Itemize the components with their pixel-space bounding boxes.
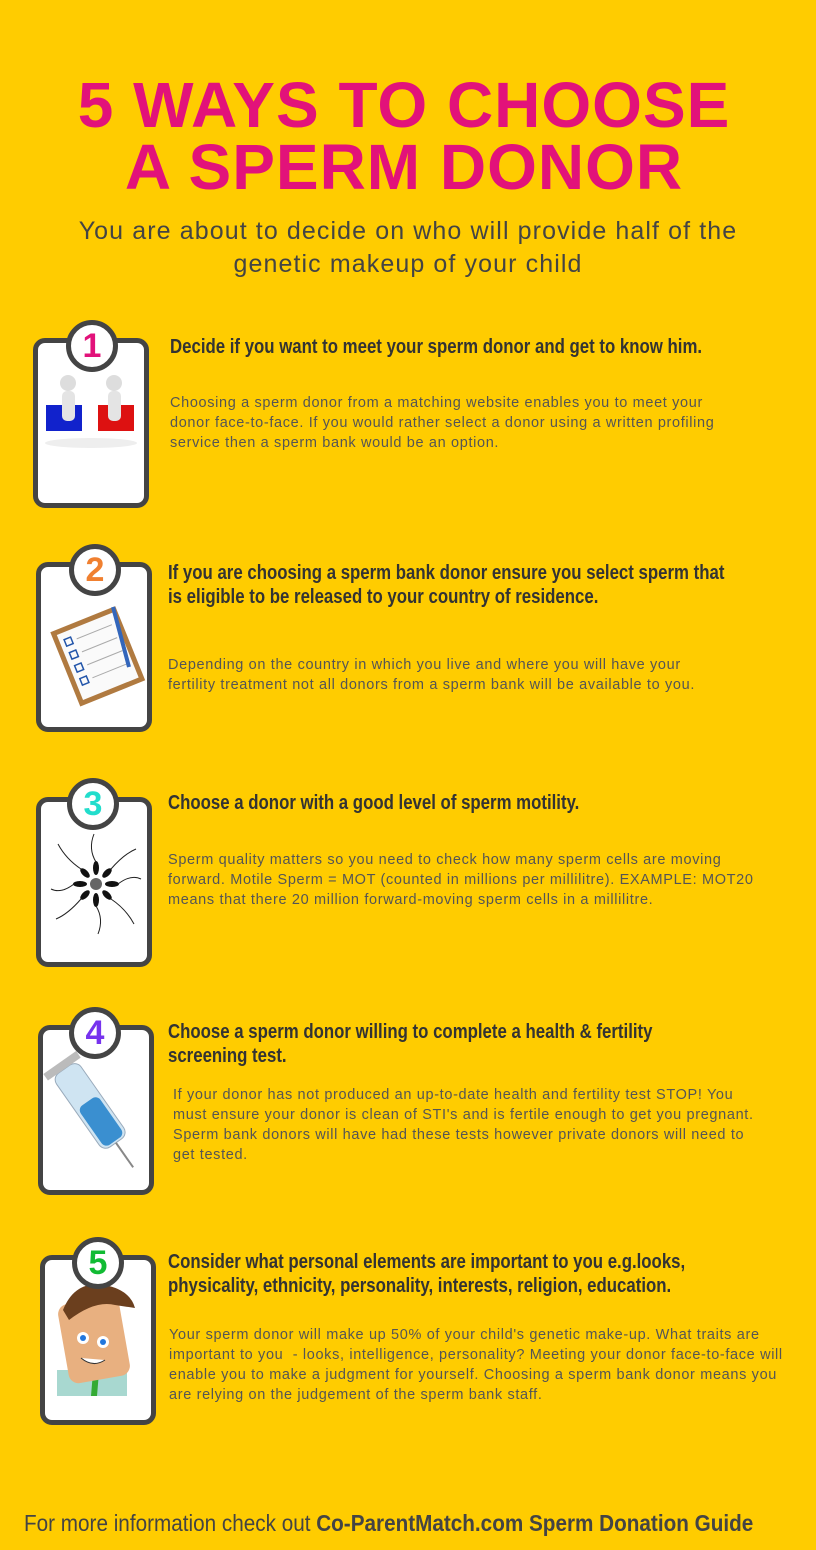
body 2 [168,657,695,693]
heading 5: Consider what personal elements are important to you e.g.looks, [168,1251,685,1273]
body 1 [170,395,714,451]
heading 5 [168,1251,685,1297]
body 4: get tested. [173,1147,248,1163]
heading 4: screening test. [168,1045,287,1067]
body 1: service then a sperm bank would be an option. [170,435,499,451]
number 2: 2 [86,551,104,589]
heading 1: Decide if you want to meet your sperm donor and get to know him. [170,336,702,358]
card 2 [36,562,152,732]
heading 5: physicality, ethnicity, personality, interests, religion, education. [168,1275,671,1297]
body 4 [173,1087,754,1163]
icon: two people on chairs [45,375,137,448]
heading 2 [168,562,724,608]
subtitle: genetic makeup of your child [233,250,583,278]
body 3: forward. Motile Sperm = MOT (counted in millions per millilitre). EXAMPLE: MOT20 [168,872,754,888]
body 2: fertility treatment not all donors from a sperm bank will be available to you. [168,677,695,693]
body 2: Depending on the country in which you live and where you will have your [168,657,681,673]
body 5 [169,1327,783,1403]
body 1: Choosing a sperm donor from a matching website enables you to meet your [170,395,703,411]
card 1 [33,338,149,508]
body 5: Your sperm donor will make up 50% of your child's genetic make-up. What traits are [169,1327,760,1343]
icon: sperm cells radiating [50,834,142,934]
body 4: Sperm bank donors will have had these tests however private donors will need to [173,1127,744,1143]
title: 5 WAYS TO CHOOSE [78,69,730,141]
body 1: donor face-to-face. If you would rather select a donor using a written profiling [170,415,714,431]
card 5 [40,1255,156,1425]
icon: clipboard checklist [50,606,146,706]
body 5: are relying on the judgement of the sperm bank staff. [169,1387,543,1403]
body 4: must ensure your donor is clean of STI's and is fertile enough to get you pregnant. [173,1107,754,1123]
number 4: 4 [86,1014,104,1052]
number 3: 3 [84,785,102,823]
number 5: 5 [89,1244,107,1282]
heading 2: If you are choosing a sperm bank donor ensure you select sperm that [168,562,724,584]
body 4: If your donor has not produced an up-to-date health and fertility test STOP! You [173,1087,733,1103]
title: A SPERM DONOR [125,131,683,203]
heading 3: Choose a donor with a good level of sperm motility. [168,792,579,814]
footer: For more information check out Co-ParentMatch.com Sperm Donation Guide [24,1510,753,1536]
number 1 [66,320,118,372]
icon: cartoon man [57,1286,135,1396]
number 4 [69,1007,121,1059]
icon: syringe [44,1051,134,1168]
body 3: means that there 20 million forward-moving sperm cells in a millilitre. [168,892,653,908]
card 3 [36,797,152,967]
body 5: enable you to make a judgment for yourself. Choosing a sperm bank donor means you [169,1367,777,1383]
heading 4: Choose a sperm donor willing to complete a health & fertility [168,1021,652,1043]
body 3 [168,852,754,908]
card 4 [38,1025,154,1195]
subtitle [79,217,737,278]
number 1: 1 [83,327,101,365]
number 3 [67,778,119,830]
heading 4 [168,1021,652,1067]
number 5 [72,1237,124,1289]
body 3: Sperm quality matters so you need to check how many sperm cells are moving [168,852,721,868]
title [78,69,730,203]
heading 2: is eligible to be released to your country of residence. [168,586,598,608]
subtitle: You are about to decide on who will provide half of the [79,217,737,245]
number 2 [69,544,121,596]
body 5: important to you - looks, intelligence, personality? Meeting your donor face-to-face will [169,1347,783,1363]
